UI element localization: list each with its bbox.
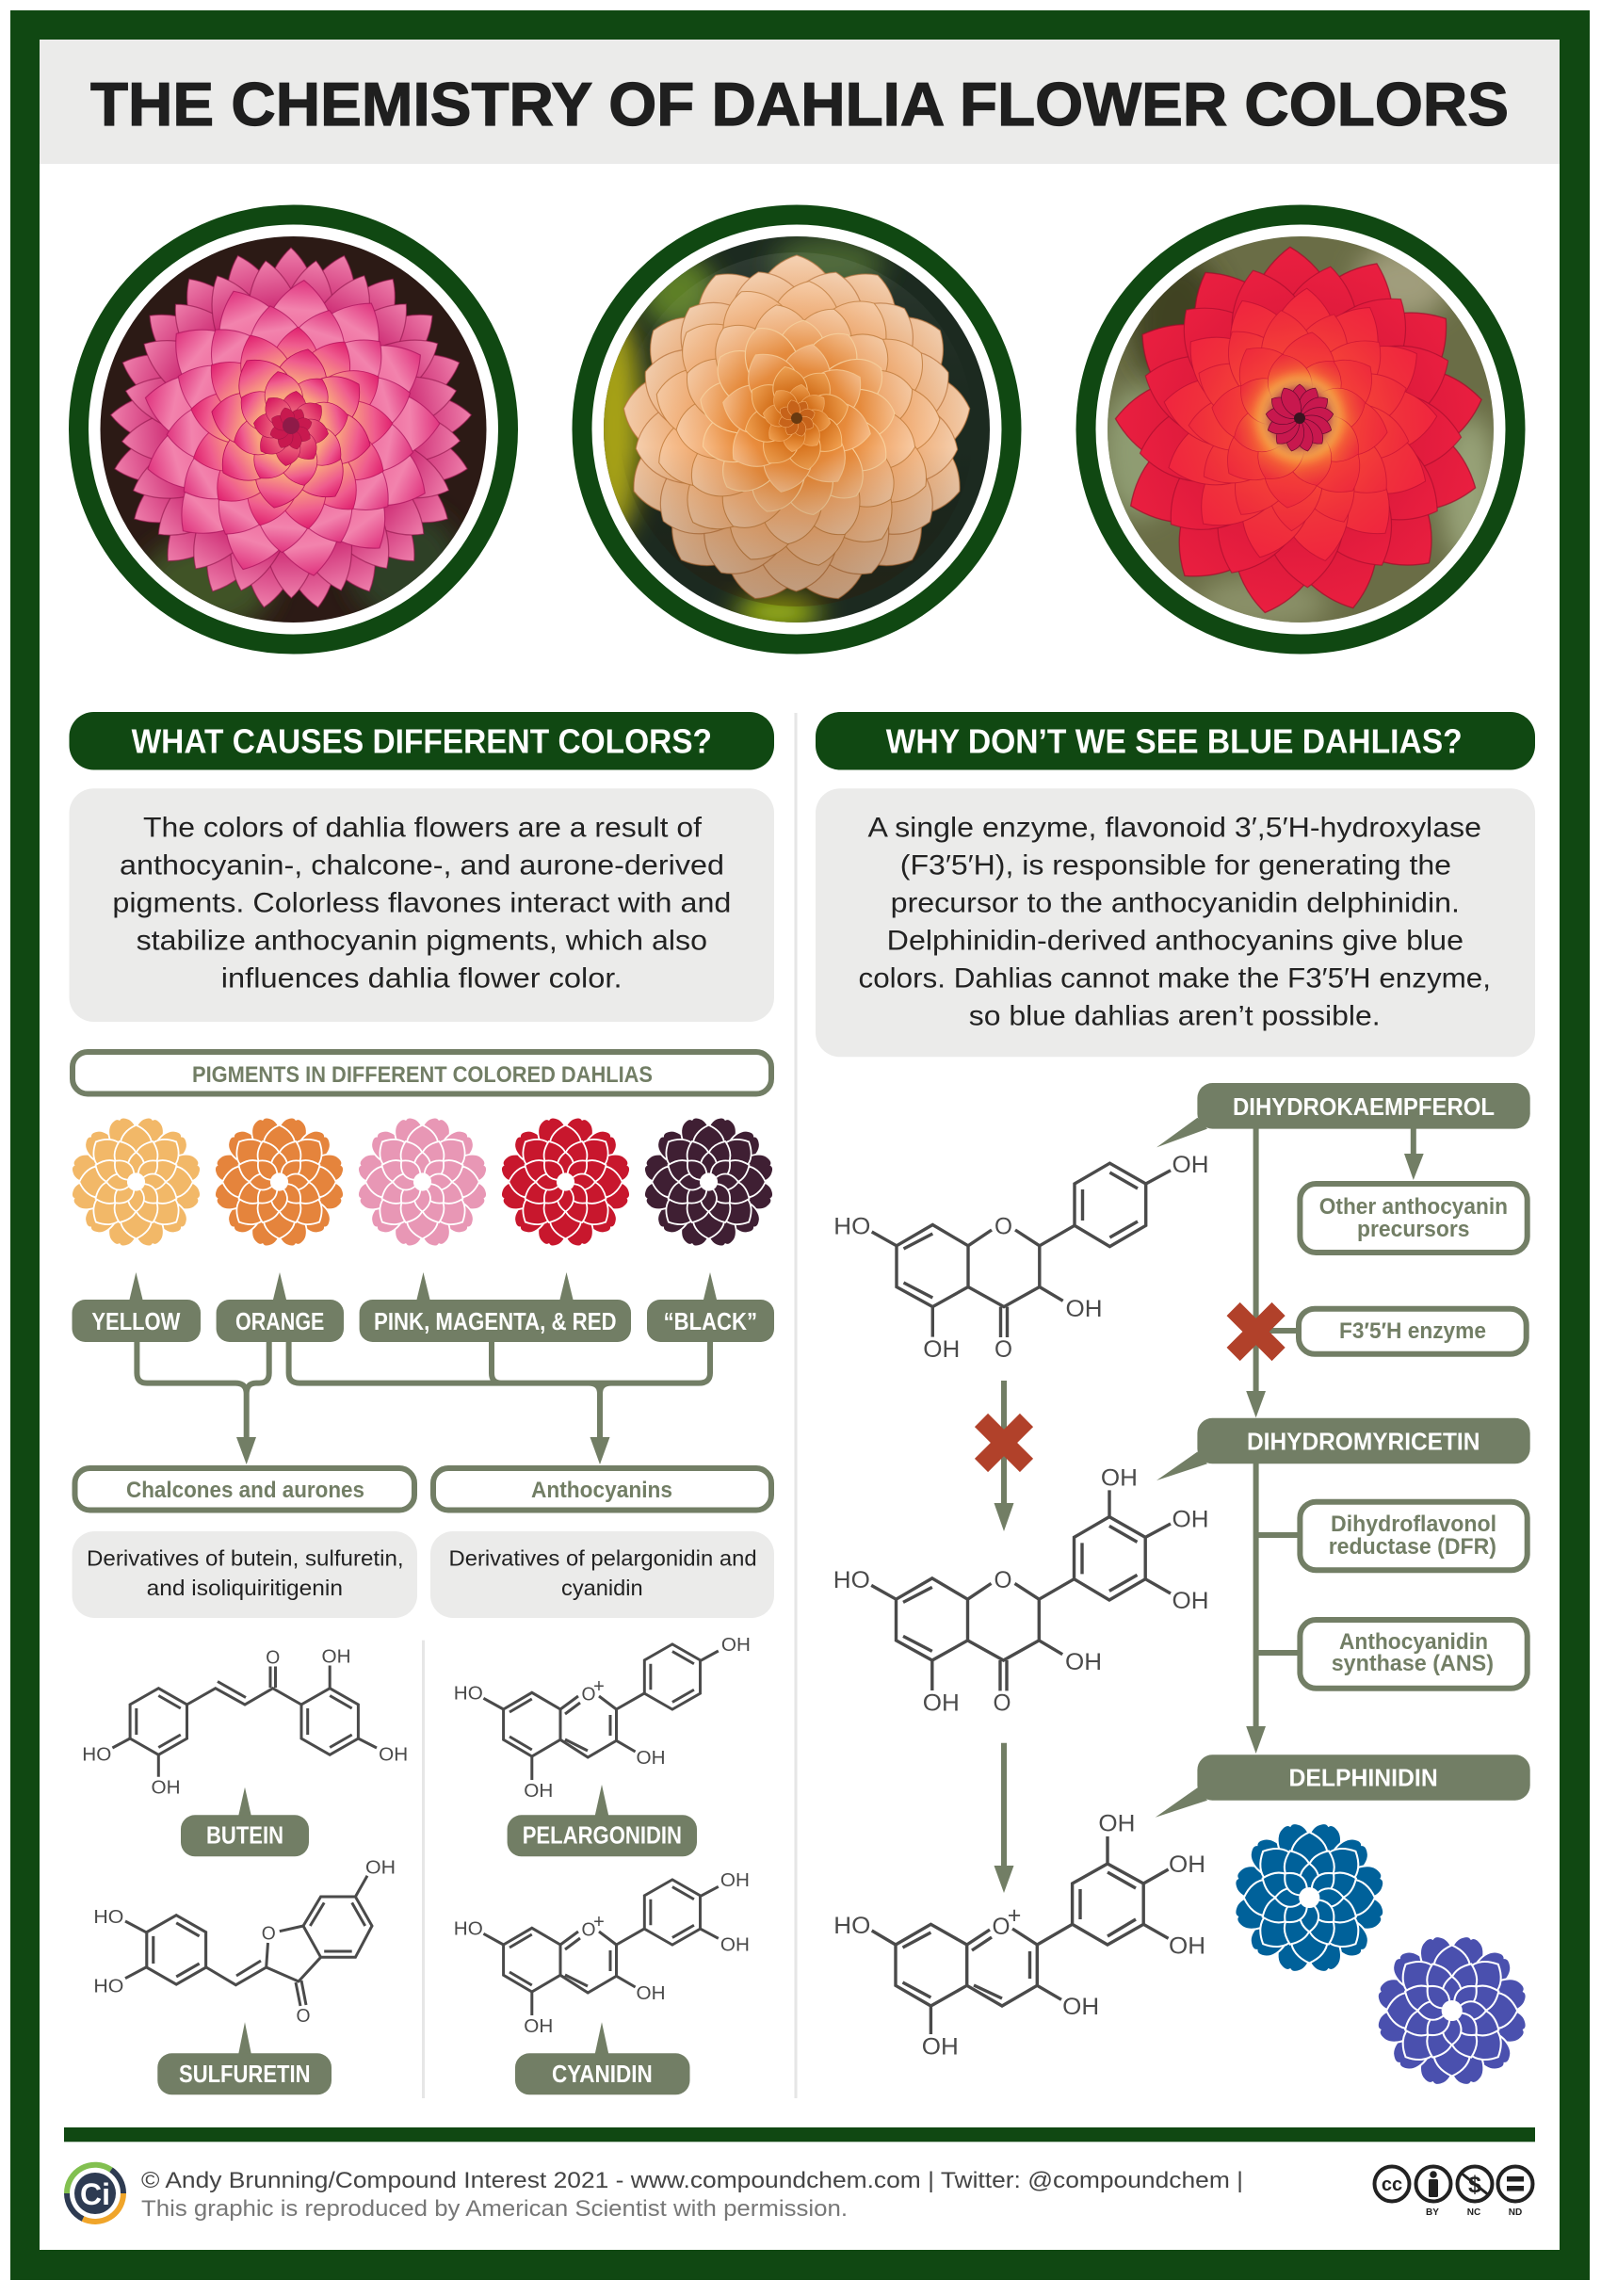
label: cyanidin <box>515 2022 689 2094</box>
structure: cyanidin: OH <box>637 1983 665 2004</box>
box: other anthocyanin precursors <box>1300 1184 1528 1253</box>
text block: blue dahlias: A single enzyme, flavonoid 3′,5′H-hydroxylase <box>868 812 1481 843</box>
text block: anthocyanins description: Derivatives of pelargonidin and <box>448 1546 757 1571</box>
flow line: main pathway <box>1246 1128 1424 1754</box>
icon: pink dahlia <box>355 1115 490 1249</box>
icon: orange dahlia <box>212 1115 347 1249</box>
heading: what causes different colors: WHAT CAUSES DIFFERENT COLORS? <box>132 721 712 760</box>
box: anthocyanins: Anthocyanins <box>531 1478 672 1503</box>
structure: pelargonidin: O <box>582 1684 595 1705</box>
text block: anthocyanins description: cyanidin <box>561 1576 643 1600</box>
structure: cyanidin: OH <box>720 1870 750 1891</box>
icon: red cross on pathway <box>1234 1309 1279 1354</box>
title: THE CHEMISTRY OF DAHLIA FLOWER COLORS <box>90 70 1509 138</box>
structure: delphinidin: O <box>993 1914 1010 1940</box>
structure: cyanidin: OH <box>720 1934 750 1955</box>
structure: dihydrokaempferol: HO <box>833 1214 870 1240</box>
structure: butein <box>82 1646 408 1799</box>
structure: dihydromyricetin: HO <box>833 1567 870 1593</box>
box: F3'5'H enzyme: F3′5′H enzyme <box>1339 1318 1486 1344</box>
structure: sulfuretin: HO <box>93 1907 123 1928</box>
box: anthocyanidin synthase <box>1300 1620 1528 1689</box>
label: sulfuretin <box>157 2022 332 2094</box>
text block: chalcones description: Derivatives of butein, sulfuretin, <box>87 1546 404 1571</box>
box: other anthocyanin precursors: precursors <box>1357 1217 1469 1242</box>
structure: delphinidin: OH <box>1169 1933 1205 1960</box>
structure: pelargonidin: OH <box>637 1748 665 1769</box>
icon: violet dahlia <box>1374 1933 1529 2088</box>
logo: compound interest <box>67 2165 123 2222</box>
structure: dihydromyricetin: OH <box>1101 1465 1138 1492</box>
label: delphinidin <box>1156 1754 1530 1818</box>
structure: sulfuretin: HO <box>93 1976 123 1997</box>
label: black: “BLACK” <box>664 1307 757 1335</box>
label: yellow: YELLOW <box>91 1307 181 1335</box>
label: dihydromyricetin <box>1156 1418 1530 1480</box>
text block: chalcones description: and isoliquiritigenin <box>147 1576 343 1600</box>
structure: dihydrokaempferol: OH <box>923 1336 960 1363</box>
box: dihydroflavonol reductase <box>1300 1502 1528 1570</box>
text block: blue dahlias: so blue dahlias aren’t possible. <box>969 1000 1381 1031</box>
structure: dihydrokaempferol: O <box>995 1214 1012 1240</box>
box: dihydroflavonol reductase: reductase (DFR) <box>1329 1534 1496 1560</box>
footer credit: © Andy Brunning/Compound Interest 2021 - www.compoundchem.com | Twitter: @compoundchem | <box>141 2168 1243 2193</box>
box: other anthocyanin precursors: Other anthocyanin <box>1319 1194 1508 1220</box>
icon: creative commons licence: ND <box>1509 2207 1522 2218</box>
label: delphinidin: DELPHINIDIN <box>1288 1764 1438 1792</box>
photo: red dahlia <box>1086 215 1515 644</box>
label: yellow <box>72 1272 201 1342</box>
text block: causes: The colors of dahlia flowers are a result of <box>143 812 703 843</box>
structure: cyanidin: O <box>582 1919 595 1940</box>
label: butein <box>181 1787 309 1856</box>
label: sulfuretin: SULFURETIN <box>179 2060 311 2088</box>
structure: sulfuretin: OH <box>365 1857 396 1878</box>
structure: dihydromyricetin: O <box>993 1690 1011 1716</box>
box: pigments heading <box>73 1052 771 1094</box>
structure: delphinidin <box>833 1811 1205 2061</box>
structure: butein: HO <box>82 1745 111 1766</box>
icon: blue dahlia <box>1232 1820 1387 1975</box>
structure: cyanidin: OH <box>524 2016 553 2037</box>
label: pelargonidin: PELARGONIDIN <box>523 1821 682 1850</box>
label: pelargonidin <box>508 1785 697 1856</box>
text block: chalcones description <box>72 1531 417 1618</box>
structure: pelargonidin: + <box>593 1676 605 1697</box>
title <box>40 40 1560 164</box>
box: F3'5'H enzyme <box>1299 1309 1527 1354</box>
text block: causes <box>70 788 774 1022</box>
structure: pelargonidin: OH <box>524 1781 553 1802</box>
icon: creative commons licence: NC <box>1467 2207 1480 2218</box>
connectors: colors to pigment classes <box>137 1342 710 1464</box>
box: chalcones and aurones: Chalcones and aurones <box>126 1478 364 1503</box>
photo: orange dahlia <box>582 215 1011 644</box>
box: anthocyanidin synthase: Anthocyanidin <box>1339 1629 1488 1655</box>
structure: dihydromyricetin: OH <box>923 1690 960 1716</box>
heading: what causes different colors <box>70 712 774 770</box>
text block: causes: pigments. Colorless flavones interact with and <box>112 887 731 918</box>
label: dihydromyricetin: DIHYDROMYRICETIN <box>1247 1428 1480 1456</box>
text block: causes: anthocyanin-, chalcone-, and aurone-derived <box>120 849 724 881</box>
heading: why no blue dahlias: WHY DON’T WE SEE BLUE DAHLIAS? <box>886 721 1463 760</box>
structure: pelargonidin: HO <box>454 1684 483 1705</box>
structure: dihydrokaempferol <box>833 1152 1209 1363</box>
label: pink, magenta, red: PINK, MAGENTA, & RED <box>374 1307 617 1335</box>
structure: delphinidin: + <box>1008 1902 1021 1929</box>
text block: blue dahlias: precursor to the anthocyanidin delphinidin. <box>891 887 1460 918</box>
arrow: blocked conversion <box>981 1381 1027 1531</box>
structure: dihydromyricetin: O <box>995 1567 1011 1593</box>
structure: pelargonidin: OH <box>721 1635 751 1656</box>
structure: delphinidin: OH <box>1169 1851 1205 1878</box>
text block: blue dahlias: Delphinidin-derived anthocyanins give blue <box>887 925 1464 956</box>
icon: yellow dahlia <box>69 1115 203 1249</box>
label: black <box>647 1272 774 1342</box>
label: pink, magenta, red <box>360 1272 631 1342</box>
divider: structures <box>422 1641 425 2098</box>
label: dihydrokaempferol <box>1156 1083 1530 1147</box>
structure: delphinidin: OH <box>1062 1994 1099 2020</box>
footer credit: This graphic is reproduced by American Scientist with permission. <box>141 2196 848 2222</box>
structure: butein: OH <box>322 1646 350 1667</box>
footer credit <box>141 2168 1243 2222</box>
structure: delphinidin: OH <box>1098 1811 1135 1837</box>
icon: creative commons licence <box>1375 2166 1533 2218</box>
text block: causes: influences dahlia flower color. <box>221 962 623 994</box>
label: cyanidin: CYANIDIN <box>552 2060 653 2088</box>
text block: anthocyanins description <box>430 1531 774 1618</box>
structure: sulfuretin <box>93 1857 396 2027</box>
structure: delphinidin: HO <box>833 1913 870 1939</box>
icon: black dahlia <box>641 1115 776 1249</box>
icon: creative commons licence: BY <box>1426 2207 1439 2218</box>
structure: delphinidin: OH <box>922 2034 959 2061</box>
icon: creative commons licence: $ <box>1468 2172 1481 2198</box>
structure: cyanidin: HO <box>454 1919 483 1940</box>
photo: pink dahlia <box>79 215 509 644</box>
structure: dihydromyricetin: OH <box>1172 1588 1209 1614</box>
text block: blue dahlias: (F3′5′H), is responsible for generating the <box>900 849 1451 881</box>
structure: sulfuretin: O <box>262 1924 276 1945</box>
structure: dihydrokaempferol: OH <box>1066 1296 1102 1322</box>
text block: causes: stabilize anthocyanin pigments, which also <box>137 925 707 956</box>
logo: compound interest: Ci <box>80 2177 110 2211</box>
structure: dihydrokaempferol: O <box>995 1336 1012 1363</box>
heading: why no blue dahlias <box>816 712 1535 770</box>
structure: sulfuretin: O <box>296 2006 311 2027</box>
label: butein: BUTEIN <box>206 1821 283 1850</box>
structure: dihydromyricetin: OH <box>1065 1649 1102 1675</box>
box: dihydroflavonol reductase: Dihydroflavonol <box>1331 1512 1496 1537</box>
structure: butein: OH <box>151 1778 181 1799</box>
label: orange <box>217 1272 344 1342</box>
structure: butein: O <box>266 1647 280 1668</box>
box: chalcones and aurones <box>75 1468 414 1511</box>
structure: cyanidin <box>454 1870 750 2037</box>
structure: dihydromyricetin <box>833 1465 1209 1716</box>
icon: creative commons licence: cc <box>1382 2175 1402 2195</box>
box: pigments heading: PIGMENTS IN DIFFERENT COLORED DAHLIAS <box>192 1062 653 1088</box>
label: dihydrokaempferol: DIHYDROKAEMPFEROL <box>1233 1092 1495 1121</box>
structure: cyanidin: + <box>593 1912 605 1932</box>
box: anthocyanidin synthase: synthase (ANS) <box>1332 1651 1494 1676</box>
icon: red dahlia <box>498 1115 633 1249</box>
structure: dihydrokaempferol: OH <box>1172 1152 1209 1178</box>
divider: columns <box>795 713 797 2098</box>
text block: blue dahlias <box>816 788 1535 1057</box>
footer bar <box>64 2127 1535 2142</box>
label: orange: ORANGE <box>235 1307 324 1335</box>
structure: butein: OH <box>379 1745 408 1766</box>
structure: dihydromyricetin: OH <box>1172 1506 1209 1532</box>
arrow: to delphinidin <box>995 1743 1013 1893</box>
box: anthocyanins <box>433 1468 771 1511</box>
text block: blue dahlias: colors. Dahlias cannot make the F3′5′H enzyme, <box>859 962 1491 994</box>
structure: pelargonidin <box>454 1635 751 1802</box>
